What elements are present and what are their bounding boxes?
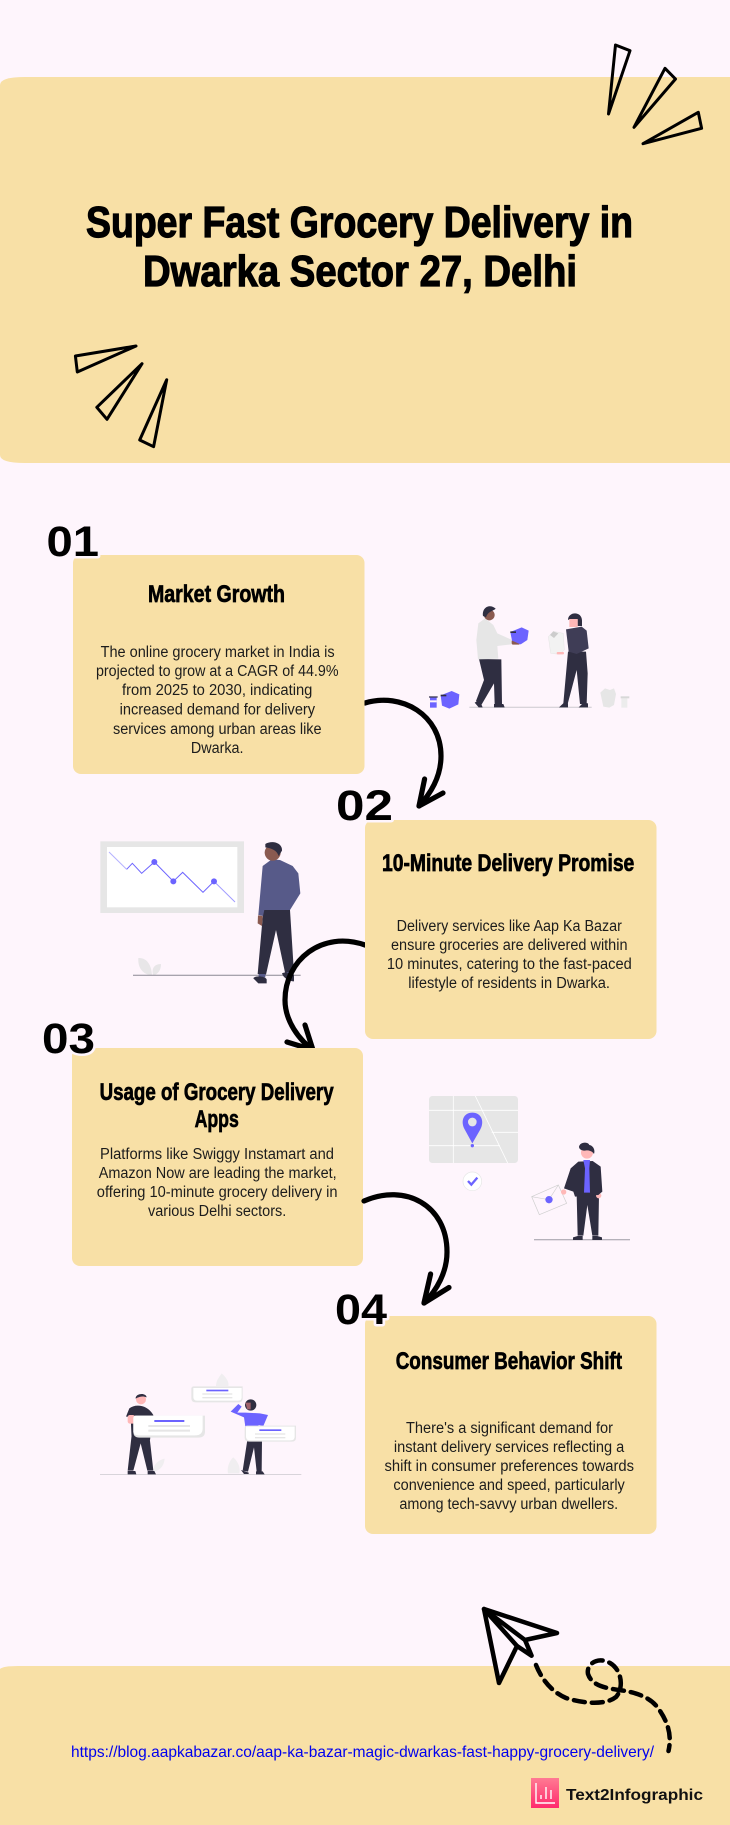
- ground: [100, 1474, 301, 1475]
- text: delivery promise body: [387, 918, 632, 992]
- text: consumer body: convenience and speed, particularly: [393, 1477, 625, 1494]
- icon: paper plane: [484, 1609, 557, 1683]
- logo: text2infographic: Text2Infographic: [566, 1787, 703, 1804]
- arrow: dashed flight path: [536, 1660, 670, 1751]
- man with box: [475, 606, 529, 707]
- man figure: [561, 1143, 602, 1240]
- text: market growth body: services among urban areas like: [113, 721, 322, 738]
- envelope: [532, 1185, 567, 1215]
- bubble large: [133, 1416, 205, 1438]
- illustration: step 2 man looking at chart: [100, 841, 301, 983]
- illustration: step 1 people exchanging a grocery box: [429, 606, 629, 709]
- man figure: [126, 1394, 156, 1474]
- text: delivery promise body: ensure groceries are delivered within: [391, 937, 628, 954]
- text: market growth body: from 2025 to 2030, indicating: [122, 682, 312, 699]
- heading: usage of grocery delivery apps: Apps: [195, 1106, 239, 1133]
- title: Super Fast Grocery Delivery in: [86, 198, 633, 247]
- number: 02: 02: [336, 782, 393, 830]
- text: usage body: Amazon Now are leading the market,: [99, 1165, 337, 1182]
- title: Dwarka Sector 27, Delhi: [143, 247, 577, 296]
- number: 03: 03: [42, 1015, 95, 1063]
- text: consumer body: shift in consumer preferences towards: [384, 1458, 634, 1475]
- text: market growth body: Dwarka.: [191, 740, 244, 757]
- arrow: step 1 to step 2: [365, 700, 443, 806]
- illustration: step 3 map and man with envelope: [429, 1096, 630, 1240]
- panel: footer band: [0, 1666, 730, 1825]
- check badge: [463, 1172, 482, 1191]
- illustration: step 4 people with speech bubbles: [100, 1373, 301, 1475]
- number: 04: 04: [335, 1286, 387, 1334]
- map: [429, 1096, 518, 1163]
- woman with bag: [548, 613, 589, 707]
- ground: [534, 1239, 630, 1240]
- panel: hero banner: [0, 77, 730, 463]
- text: usage body: [97, 1146, 338, 1220]
- bubble right: [245, 1426, 296, 1442]
- heading: usage of grocery delivery apps: Usage of Grocery Delivery: [100, 1079, 334, 1106]
- heading: usage of grocery delivery apps: [100, 1079, 334, 1133]
- text: usage body: offering 10-minute grocery delivery in: [97, 1184, 338, 1201]
- text: market growth body: increased demand for delivery: [120, 702, 315, 718]
- arrow: step 2 to step 3: [285, 941, 365, 1052]
- text: delivery promise body: 10 minutes, catering to the fast-paced: [387, 956, 632, 973]
- left cup and box: [429, 691, 459, 709]
- woman figure: [231, 1399, 268, 1474]
- icon: bottom left spark lines: [75, 346, 167, 447]
- heading: consumer behavior shift: Consumer Behavior Shift: [396, 1348, 622, 1375]
- text: consumer body: [384, 1420, 634, 1513]
- plant: [138, 958, 161, 975]
- text: delivery promise body: Delivery services like Aap Ka Bazar: [397, 918, 622, 935]
- text: delivery promise body: lifestyle of residents in Dwarka.: [408, 975, 610, 992]
- panel: step 4 card: [365, 1316, 656, 1534]
- text: market growth body: projected to grow at a CAGR of 44.9%: [96, 663, 339, 680]
- text: market growth body: [96, 644, 339, 757]
- panel: step 1 card: [73, 555, 364, 774]
- text: usage body: Platforms like Swiggy Instamart and: [100, 1146, 334, 1163]
- text: consumer body: instant delivery services reflecting a: [394, 1439, 625, 1456]
- text: consumer body: There's a significant demand for: [406, 1420, 613, 1437]
- bubble top: [191, 1386, 243, 1402]
- text: consumer body: among tech-savvy urban dwellers.: [399, 1496, 618, 1513]
- chart board: [100, 841, 244, 913]
- plants: [153, 1373, 240, 1473]
- right box and cup: [600, 688, 629, 708]
- text: usage body: various Delhi sectors.: [148, 1203, 286, 1220]
- logo: text2infographic: [531, 1778, 703, 1808]
- text: market growth body: The online grocery market in India is: [101, 644, 335, 661]
- icon: top right spark lines: [608, 45, 702, 144]
- ground: [469, 707, 592, 708]
- ground: [133, 975, 301, 976]
- number: 01: 01: [46, 518, 99, 566]
- heading: 10-minute delivery promise: 10-Minute Delivery Promise: [382, 850, 634, 877]
- text: source url: https://blog.aapkabazar.co/aap-ka-bazar-magic-dwarkas-fast-happy-grocery-delivery/: [71, 1744, 655, 1761]
- heading: market growth: Market Growth: [148, 581, 285, 608]
- man figure: [253, 842, 300, 983]
- panel: step 2 card: [365, 820, 656, 1039]
- title: [86, 198, 633, 296]
- panel: step 3 card: [72, 1048, 363, 1266]
- arrow: step 3 to step 4: [364, 1195, 449, 1303]
